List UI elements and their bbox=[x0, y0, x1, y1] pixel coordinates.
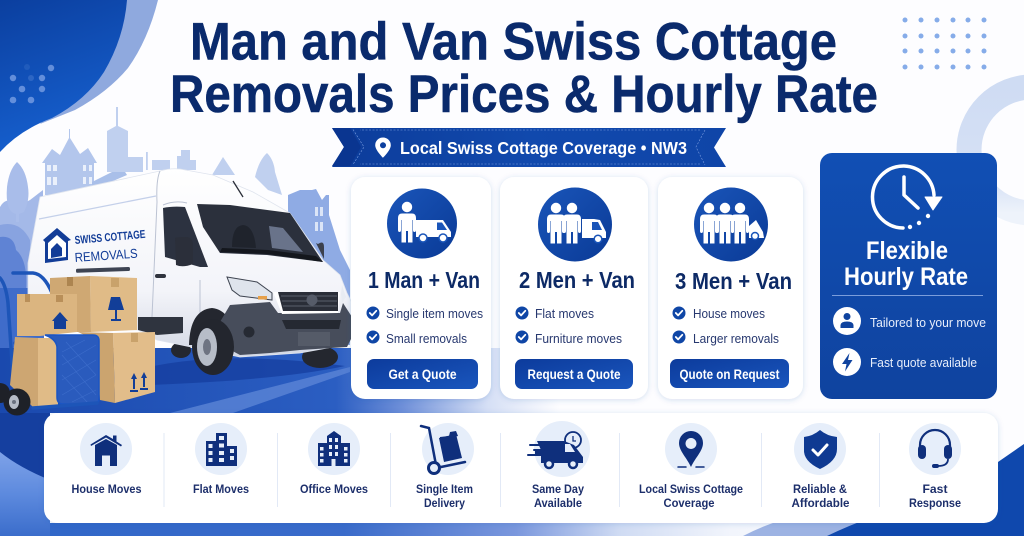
left trees and foliage bbox=[0, 190, 43, 350]
title: Man and Van Swiss Cottage bbox=[190, 12, 837, 72]
service: single item delivery bbox=[416, 423, 474, 510]
service: reliable and affordable: Affordable bbox=[792, 496, 850, 510]
feature list: Larger removals bbox=[693, 332, 779, 346]
decorative ring bbox=[969, 87, 1024, 213]
icon: two men and van bbox=[538, 188, 612, 262]
tower and low buildings bbox=[107, 107, 143, 172]
title bbox=[170, 12, 878, 124]
feature list bbox=[672, 306, 779, 346]
feature list: Single item moves bbox=[386, 307, 483, 321]
box top right bbox=[90, 276, 137, 332]
card: 3 Men + Van: 3 Men + Van bbox=[675, 268, 792, 294]
card: 2 Men + Van: 2 Men + Van bbox=[519, 267, 635, 293]
side window bbox=[163, 207, 208, 267]
button: Request a Quote bbox=[528, 367, 621, 382]
service: fast response bbox=[909, 423, 961, 510]
service: local coverage: Local Swiss Cottage bbox=[639, 482, 743, 496]
windshield bbox=[197, 204, 323, 262]
houses bbox=[42, 129, 97, 195]
icon: one man and van bbox=[387, 188, 457, 258]
grille bbox=[273, 292, 340, 314]
service: flat moves bbox=[193, 423, 249, 496]
service: reliable and affordable bbox=[792, 423, 850, 510]
card: 1 Man + Van bbox=[351, 177, 491, 399]
feature list bbox=[366, 306, 483, 346]
right side house and trees bbox=[288, 189, 350, 345]
panel heading: Flexible bbox=[866, 237, 948, 265]
bumper bbox=[220, 302, 352, 355]
panel heading: Hourly Rate bbox=[844, 263, 968, 291]
feature list: Small removals bbox=[386, 332, 467, 346]
headlight bbox=[227, 277, 272, 300]
decorative blue corner shape bbox=[0, 0, 158, 152]
van logo: REMOVALS bbox=[74, 246, 138, 265]
ground bbox=[0, 348, 560, 413]
service: house moves: House Moves bbox=[72, 482, 142, 496]
box top left bbox=[17, 294, 77, 336]
icon: three men and van bbox=[694, 188, 768, 262]
service: reliable and affordable: Reliable & bbox=[793, 482, 847, 496]
button: Quote on Request bbox=[680, 367, 780, 382]
service: office moves: Office Moves bbox=[300, 482, 368, 496]
feature list: Flat moves bbox=[535, 307, 594, 321]
service: fast response: Response bbox=[909, 496, 961, 510]
dot grid top right bbox=[902, 18, 986, 70]
trolley frame bbox=[0, 273, 52, 403]
button: Get a Quote bbox=[388, 367, 457, 382]
front wheel bbox=[192, 319, 234, 375]
white van bbox=[28, 169, 352, 375]
location ribbon: Local Swiss Cottage Coverage • NW3 bbox=[400, 138, 687, 158]
panel: flexible hourly rate: Fast quote available bbox=[870, 355, 977, 370]
icon: location pin bbox=[375, 138, 391, 158]
skyline bbox=[0, 107, 350, 350]
boxes and trolley bbox=[0, 273, 155, 416]
icon: lightning bolt bbox=[833, 348, 861, 376]
feature list bbox=[516, 306, 622, 346]
service: single item delivery: Delivery bbox=[424, 496, 465, 510]
services strip bbox=[44, 413, 998, 523]
van logo: SWISS COTTAGE bbox=[74, 229, 146, 247]
box bottom left bbox=[10, 337, 38, 407]
feature list: House moves bbox=[693, 307, 765, 321]
service: local coverage bbox=[639, 423, 743, 510]
button bbox=[670, 359, 789, 388]
button bbox=[515, 359, 633, 389]
service: flat moves: Flat Moves bbox=[193, 482, 249, 496]
button bbox=[367, 359, 478, 389]
icon: clock bbox=[872, 166, 942, 229]
service: single item delivery: Single Item bbox=[416, 482, 473, 496]
wheel arch bbox=[189, 308, 238, 345]
card: 1 Man + Van: 1 Man + Van bbox=[368, 267, 480, 293]
location ribbon bbox=[332, 128, 726, 167]
panel heading bbox=[844, 237, 968, 291]
panel: flexible hourly rate: Tailored to your move bbox=[870, 315, 986, 330]
trolley base bbox=[33, 403, 97, 408]
service: same day available: Same Day bbox=[532, 482, 584, 496]
service: same day available: Available bbox=[534, 496, 582, 510]
service: fast response: Fast bbox=[922, 482, 948, 496]
trolley wheels bbox=[0, 383, 10, 403]
box bottom right bbox=[113, 332, 155, 403]
service: house moves bbox=[72, 423, 142, 496]
card: 3 Men + Van bbox=[658, 177, 803, 399]
card: 2 Men + Van bbox=[500, 177, 648, 399]
panel: flexible hourly rate bbox=[820, 153, 997, 399]
service: local coverage: Coverage bbox=[664, 496, 715, 510]
far wheels bbox=[302, 346, 338, 368]
service: office moves bbox=[300, 423, 368, 496]
icon: person bbox=[833, 307, 861, 335]
title: Removals Prices & Hourly Rate bbox=[170, 65, 878, 124]
van logo bbox=[43, 228, 146, 265]
feature list: Furniture moves bbox=[535, 332, 622, 346]
service: same day available bbox=[528, 421, 590, 510]
van body bbox=[28, 169, 352, 357]
moving blanket bbox=[45, 335, 99, 404]
